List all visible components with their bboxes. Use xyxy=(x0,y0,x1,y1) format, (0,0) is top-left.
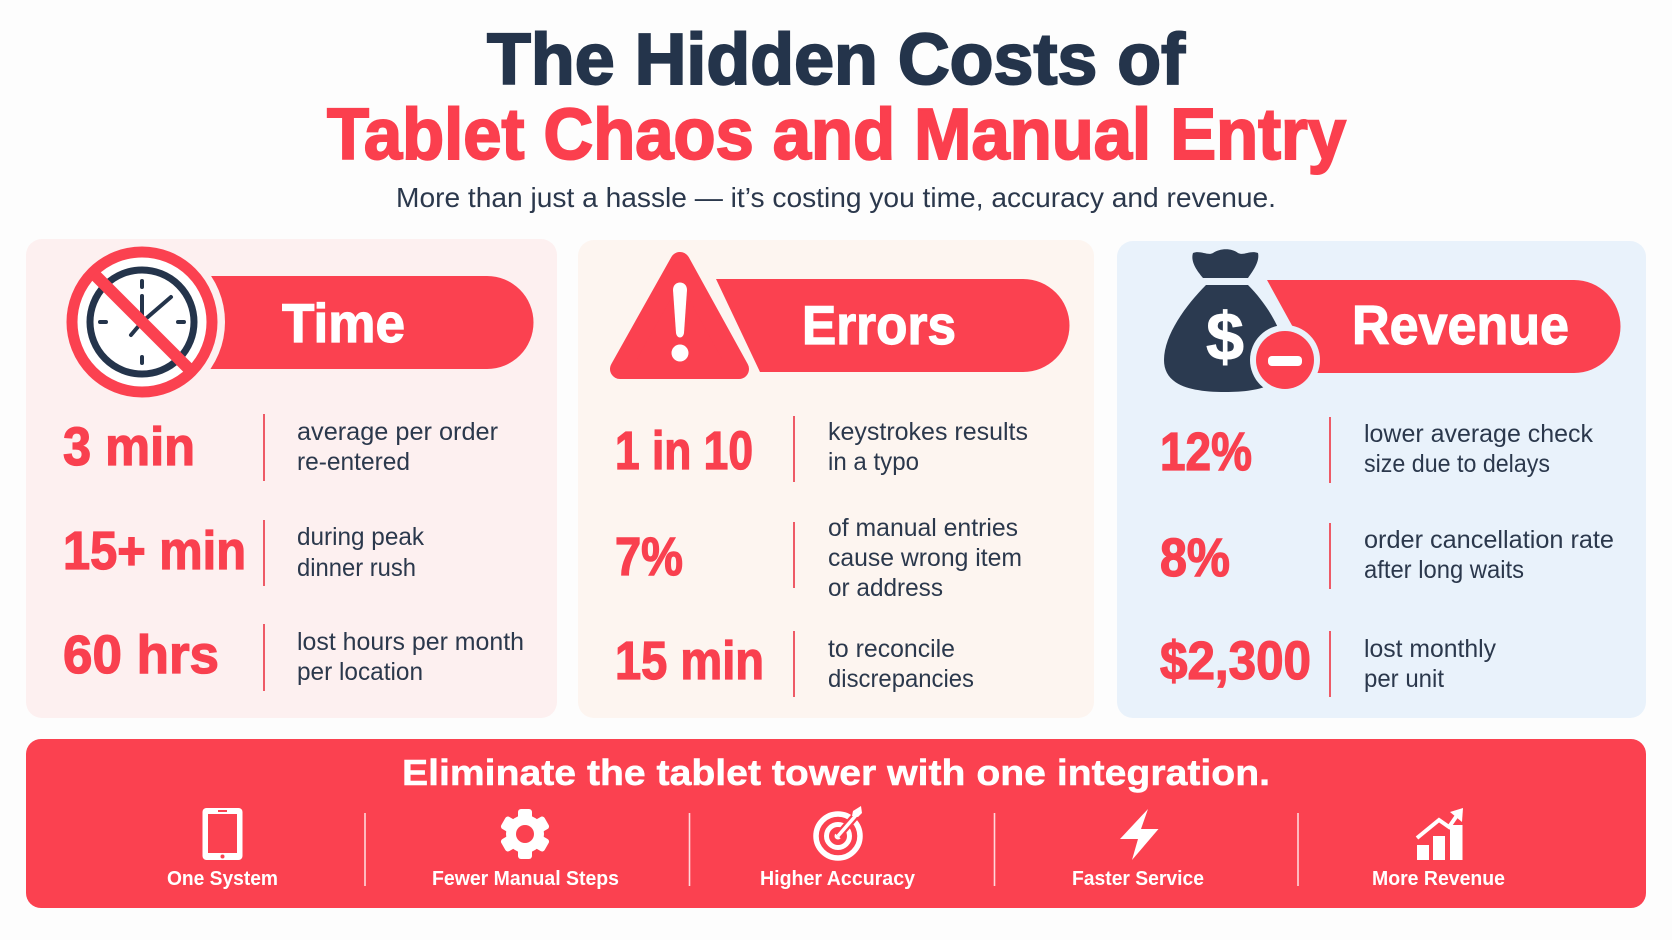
item: faster service: Faster Service xyxy=(1072,868,1204,890)
stat: 15+ min xyxy=(63,520,424,586)
icon: tablet xyxy=(202,808,242,860)
stat: $2,300: lost monthly xyxy=(1364,635,1496,663)
icon: warning triangle xyxy=(620,262,739,369)
stat: 60 hrs: per location xyxy=(297,658,423,686)
stat: 12%: 12% xyxy=(1160,422,1252,482)
panel: time xyxy=(26,239,557,718)
stat: 7% xyxy=(615,514,1022,602)
item: higher accuracy: Higher Accuracy xyxy=(760,868,916,890)
panel: revenue xyxy=(1117,241,1646,718)
stat: 1 in 10: in a typo xyxy=(828,448,919,476)
stat: 8%: 8% xyxy=(1160,528,1230,588)
item: fewer manual steps: Fewer Manual Steps xyxy=(432,868,619,890)
item: more revenue: More Revenue xyxy=(1372,868,1505,890)
item: more revenue xyxy=(1372,808,1505,890)
stat: $2,300: $2,300 xyxy=(1160,631,1311,691)
stat: 15+ min: during peak xyxy=(297,523,424,551)
stat: 3 min: re-entered xyxy=(297,448,410,476)
stat: 8%: after long waits xyxy=(1364,556,1524,584)
errors header pill: Errors xyxy=(802,294,956,356)
title: Tablet Chaos and Manual Entry xyxy=(327,95,1346,175)
stat: 7%: cause wrong item xyxy=(828,544,1022,572)
stat: 15 min: 15 min xyxy=(615,631,764,691)
revenue header pill: Revenue xyxy=(1352,294,1569,356)
stat: 15 min: discrepancies xyxy=(828,665,974,693)
title: The Hidden Costs of xyxy=(487,20,1186,100)
item: higher accuracy xyxy=(760,806,916,890)
icon: growth chart xyxy=(1417,808,1463,860)
stat: 15 min xyxy=(615,631,974,697)
icon: money bag with minus xyxy=(1164,249,1320,395)
time header pill: Time xyxy=(282,292,405,354)
stat: 8%: order cancellation rate xyxy=(1364,526,1614,554)
stat: 8% xyxy=(1160,523,1614,589)
stat: 12% xyxy=(1160,417,1593,483)
item: fewer manual steps xyxy=(432,809,619,890)
stat: 12%: size due to delays xyxy=(1364,450,1550,478)
stat: 1 in 10: 1 in 10 xyxy=(615,421,753,481)
banner heading: Eliminate the tablet tower with one integration. xyxy=(402,752,1270,793)
item: one system: One System xyxy=(167,868,278,890)
stat: $2,300 xyxy=(1160,631,1496,697)
stat: 1 in 10 xyxy=(615,416,1028,482)
icon: crossed-out clock xyxy=(59,239,225,405)
stat: 60 hrs: lost hours per month xyxy=(297,628,524,656)
time header pill xyxy=(200,276,534,369)
stat: 15 min: to reconcile xyxy=(828,635,955,663)
title xyxy=(327,20,1346,175)
stat: 60 hrs: 60 hrs xyxy=(63,625,219,685)
icon: money bag with minus: $ xyxy=(1206,299,1244,375)
icon: target xyxy=(816,806,862,858)
stat: 7%: or address xyxy=(828,574,943,602)
errors header pill xyxy=(716,279,1070,372)
item: one system xyxy=(167,808,278,890)
stat: 3 min xyxy=(63,414,498,481)
subtitle: More than just a hassle — it’s costing you time, accuracy and revenue. xyxy=(396,182,1276,213)
revenue header pill xyxy=(1267,280,1620,373)
stat: 15+ min: 15+ min xyxy=(63,521,246,581)
stat: 3 min: average per order xyxy=(297,418,498,446)
stat: 12%: lower average check xyxy=(1364,420,1593,448)
panel: errors xyxy=(578,240,1094,718)
stat: 60 hrs xyxy=(63,624,524,691)
panel: call to action banner xyxy=(26,739,1646,908)
stat: $2,300: per unit xyxy=(1364,665,1444,693)
icon: lightning bolt xyxy=(1120,809,1158,860)
stat: 7%: 7% xyxy=(615,527,683,587)
stat: 7%: of manual entries xyxy=(828,514,1018,542)
icon: gear xyxy=(500,809,550,859)
stat: 3 min: 3 min xyxy=(63,417,195,477)
stat: 15+ min: dinner rush xyxy=(297,554,416,582)
item: faster service xyxy=(1072,809,1204,890)
stat: 1 in 10: keystrokes results xyxy=(828,418,1028,446)
